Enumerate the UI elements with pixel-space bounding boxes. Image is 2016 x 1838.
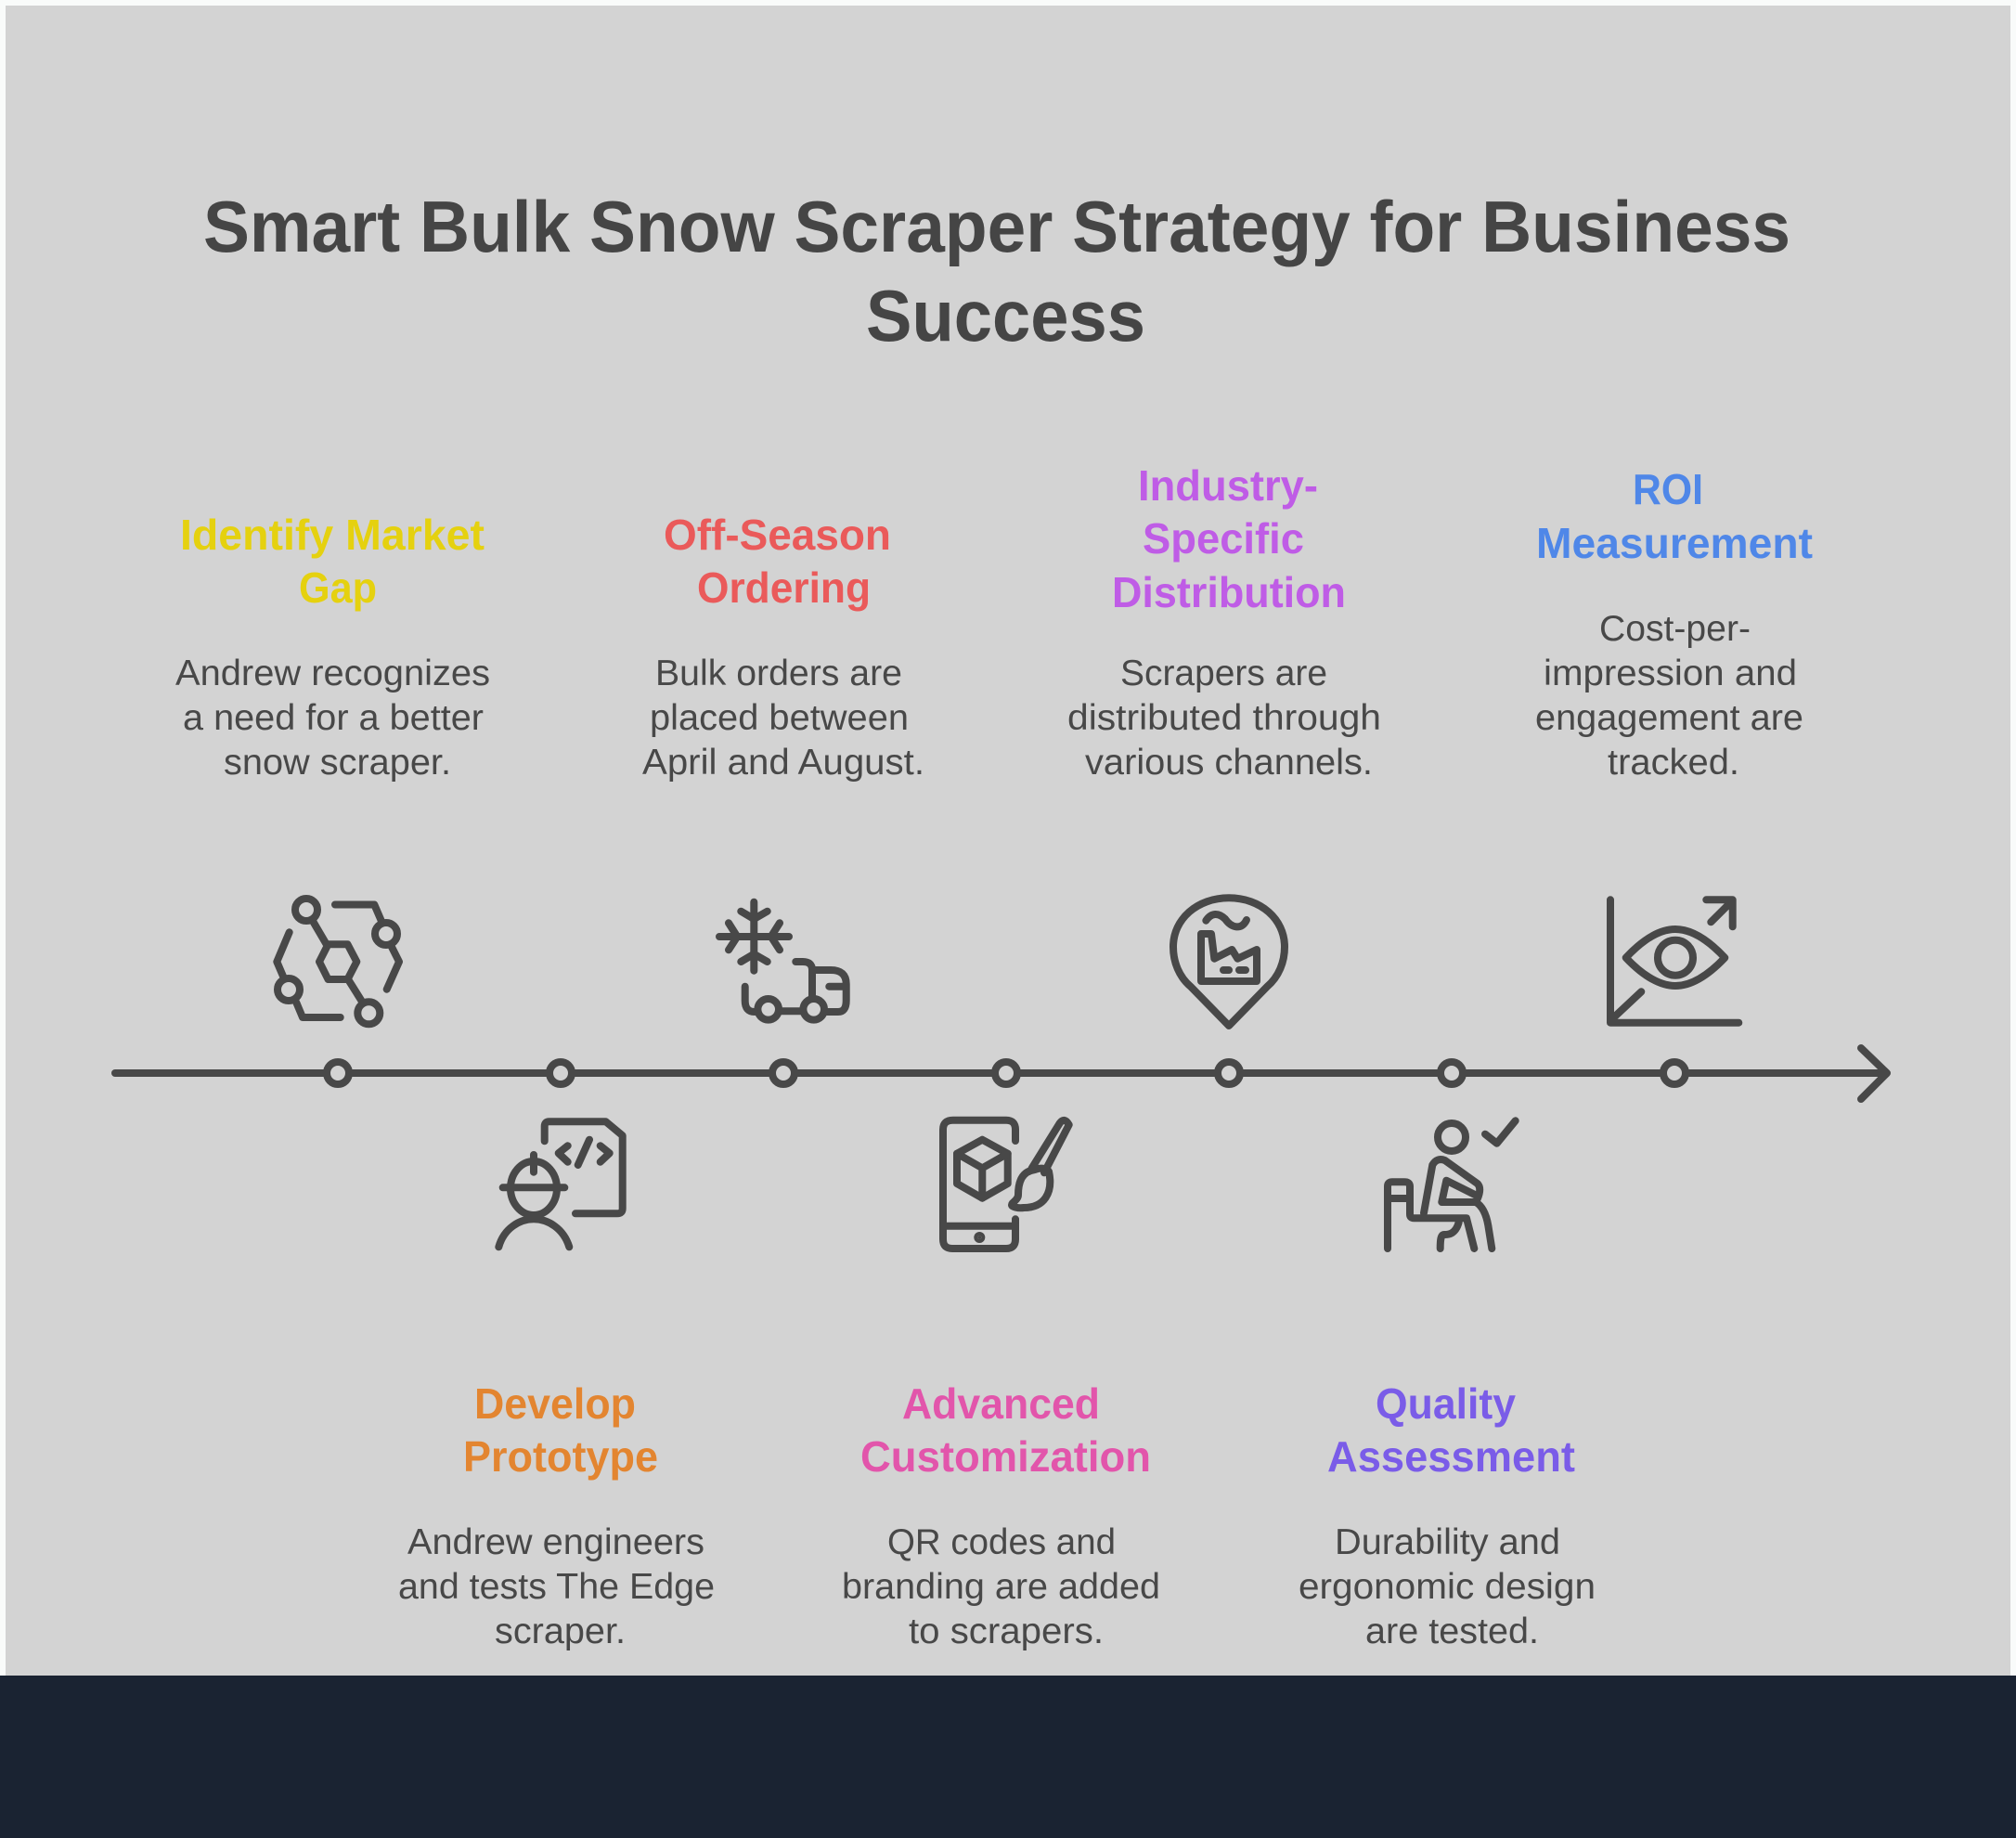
description	[842, 1522, 1160, 1651]
description	[1299, 1522, 1596, 1651]
heading: Distribution	[1112, 568, 1346, 616]
heading: Specific	[1143, 514, 1304, 563]
title: Success	[866, 275, 1145, 356]
description: scraper.	[495, 1611, 626, 1651]
description	[1067, 654, 1381, 783]
description: distributed through	[1067, 698, 1381, 738]
description	[175, 654, 490, 783]
step: Quality Assessment	[1299, 1120, 1596, 1651]
timeline nodes	[327, 1062, 1686, 1084]
timeline arrow	[115, 1048, 1887, 1099]
description: Andrew engineers	[407, 1522, 704, 1562]
heading	[1112, 461, 1346, 616]
description: QR codes and	[887, 1522, 1116, 1562]
description: Bulk orders are	[655, 654, 902, 693]
description: impression and	[1544, 654, 1797, 693]
heading	[1536, 465, 1813, 567]
icon: eye on growth chart	[1610, 900, 1738, 1023]
icon: phone with cube and brush	[943, 1120, 1069, 1249]
heading	[463, 1379, 658, 1481]
footer band	[0, 1676, 2016, 1838]
description	[642, 654, 924, 783]
description	[1535, 609, 1803, 783]
title: Smart Bulk Snow Scraper Strategy for Business	[203, 186, 1790, 267]
description: branding are added	[842, 1567, 1160, 1607]
heading: Prototype	[463, 1432, 658, 1481]
description: ergonomic design	[1299, 1567, 1596, 1607]
description: Durability and	[1335, 1522, 1560, 1562]
description: Cost-per-	[1599, 609, 1751, 649]
description	[398, 1522, 715, 1651]
heading: ROI	[1633, 465, 1703, 513]
heading: Industry-	[1138, 461, 1318, 510]
description: snow scraper.	[224, 743, 451, 783]
step: ROI Measurement	[1535, 465, 1813, 1023]
heading: Measurement	[1536, 519, 1813, 567]
step: Off-Season Ordering	[642, 511, 924, 1020]
description: Andrew recognizes	[175, 654, 490, 693]
description: engagement are	[1535, 698, 1803, 738]
description: and tests The Edge	[398, 1567, 715, 1607]
heading	[1327, 1379, 1575, 1481]
title	[203, 186, 1790, 356]
description: are tested.	[1365, 1611, 1539, 1651]
step: Develop Prototype	[398, 1121, 715, 1651]
heading: Identify Market	[180, 511, 485, 559]
step: Industry-Specific Distribution	[1067, 461, 1381, 1026]
heading: Gap	[299, 563, 377, 612]
description: tracked.	[1608, 743, 1739, 783]
description: placed between	[650, 698, 909, 738]
icon: engineer with code file	[498, 1121, 623, 1247]
heading: Assessment	[1327, 1432, 1575, 1481]
heading: Quality	[1376, 1379, 1516, 1428]
description: Scrapers are	[1120, 654, 1327, 693]
heading	[664, 511, 891, 612]
icon: snowflake and truck	[719, 902, 846, 1020]
heading: Off-Season	[664, 511, 891, 559]
heading	[180, 511, 485, 612]
heading: Develop	[474, 1379, 636, 1428]
step: Identify Market Gap	[175, 511, 490, 1024]
step: Advanced Customization	[842, 1120, 1160, 1651]
icon: seated person with check	[1388, 1120, 1516, 1249]
heading: Ordering	[697, 563, 871, 612]
description: a need for a better	[183, 698, 484, 738]
icon: molecule network	[277, 899, 399, 1024]
heading: Customization	[860, 1432, 1151, 1481]
icon: factory location pin	[1173, 898, 1285, 1026]
description: various channels.	[1085, 743, 1373, 783]
description: to scrapers.	[909, 1611, 1104, 1651]
heading	[860, 1379, 1151, 1481]
description: April and August.	[642, 743, 924, 783]
heading: Advanced	[902, 1379, 1100, 1428]
